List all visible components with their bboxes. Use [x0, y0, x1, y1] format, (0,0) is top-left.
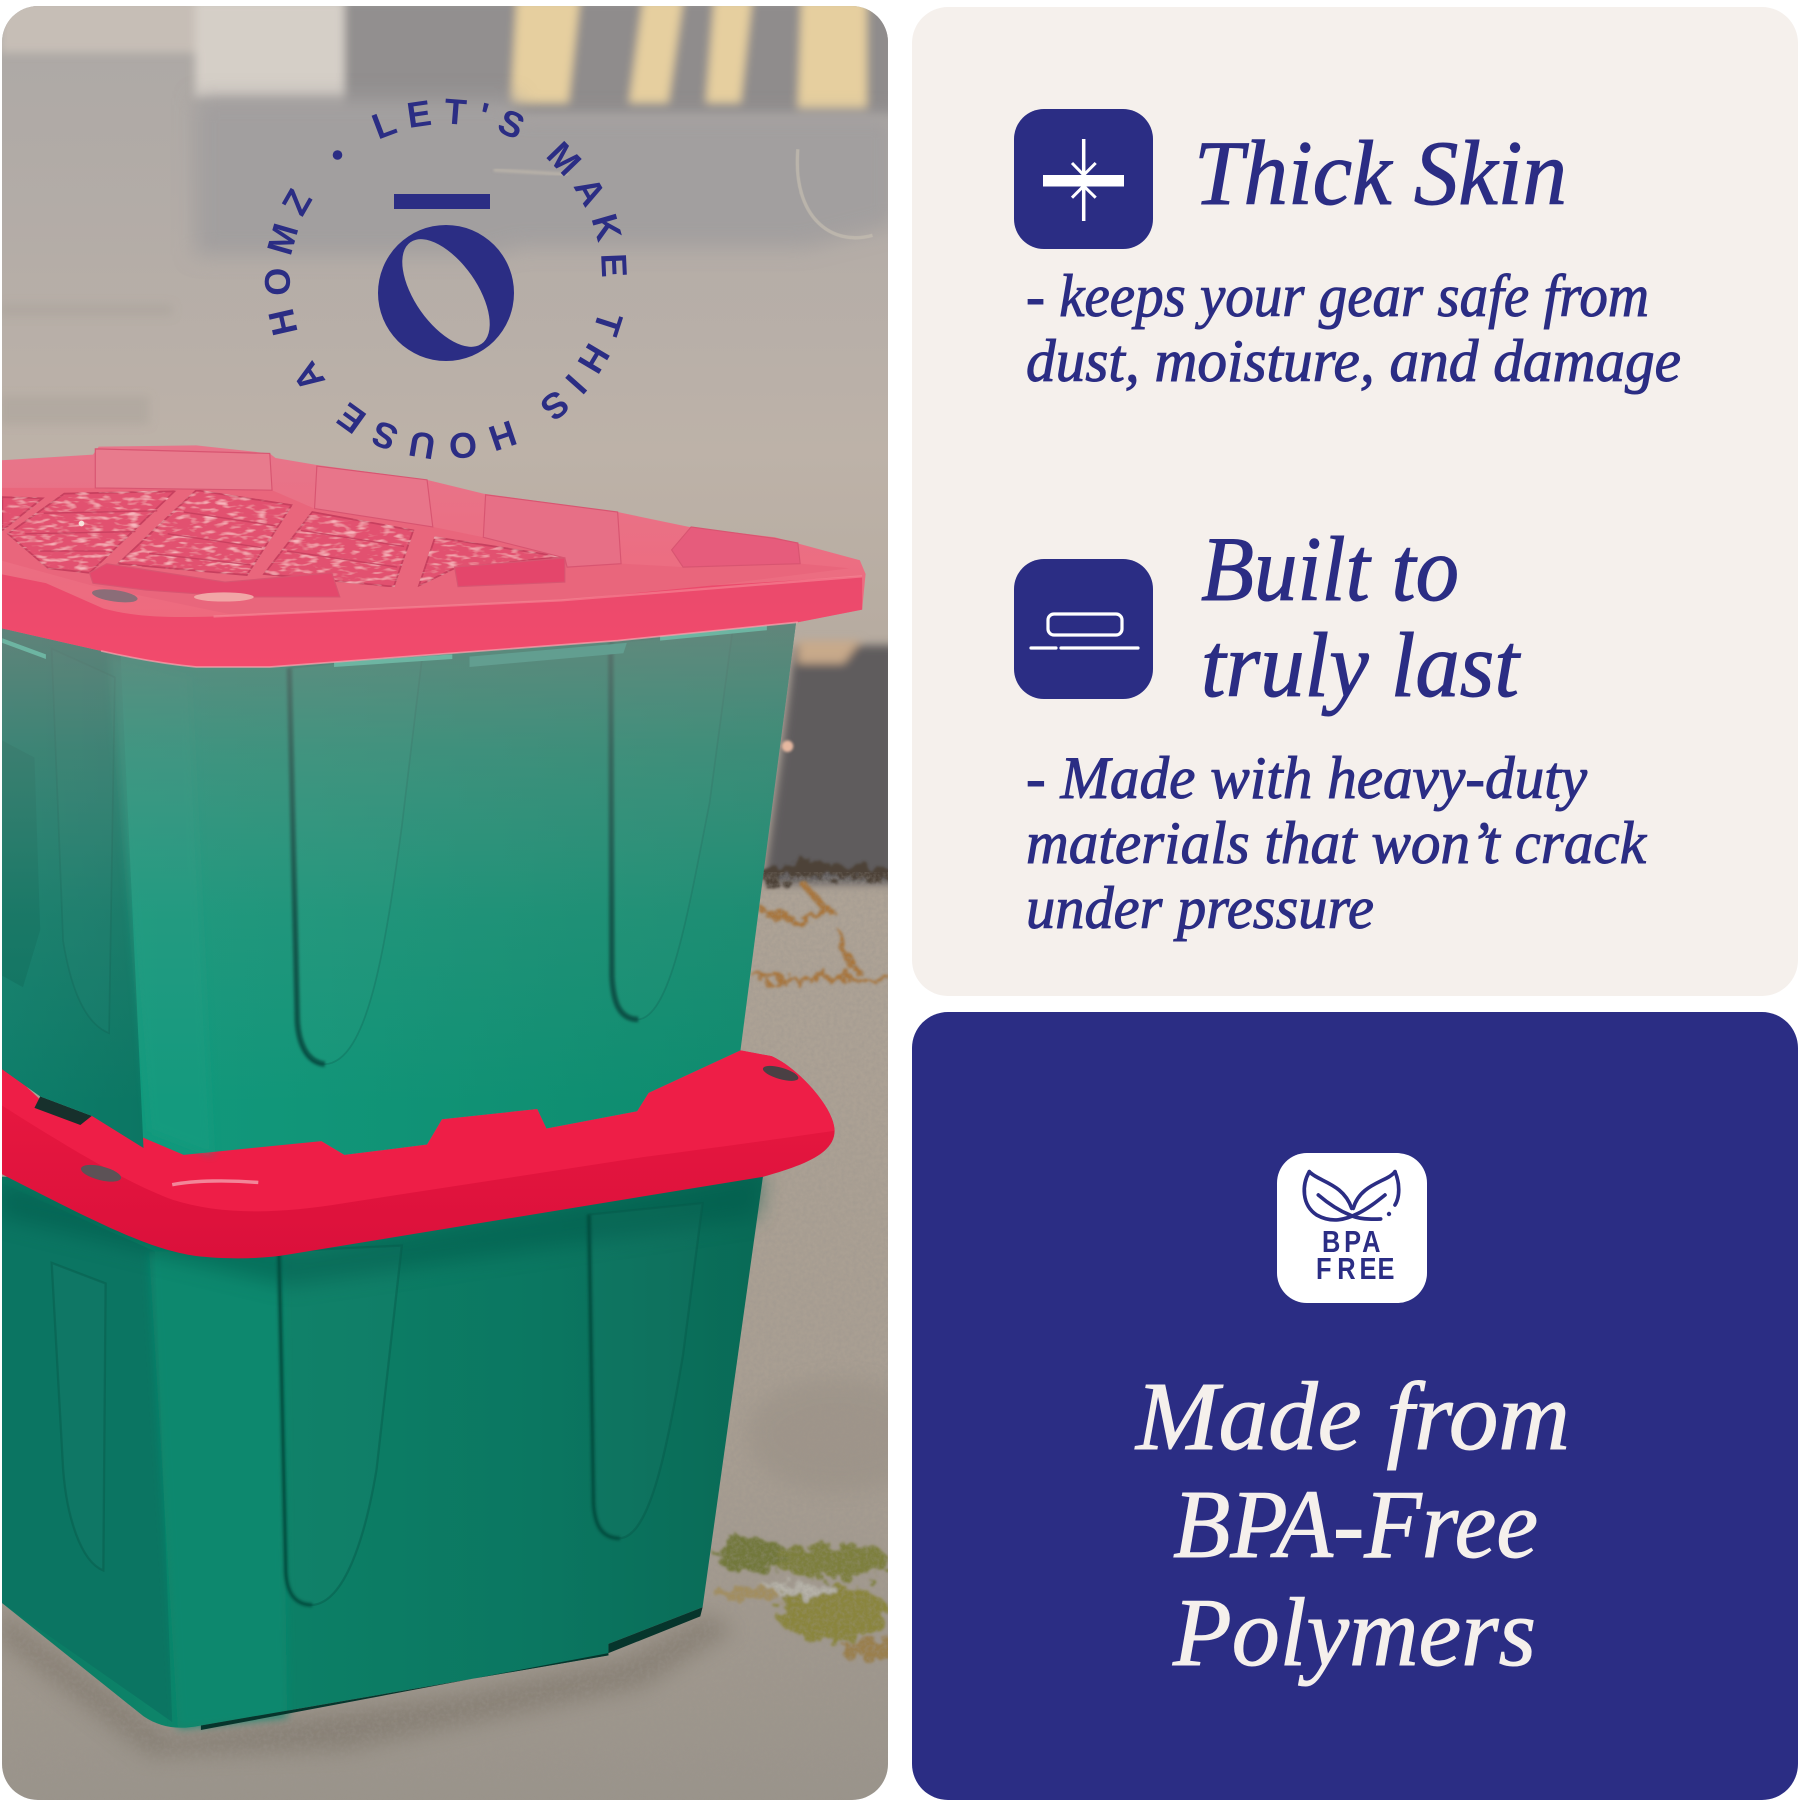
lid raised tabs — [90, 449, 800, 597]
text: built to last description: under pressure — [1026, 875, 1374, 941]
panel: product photo — [0, 0, 930, 1800]
circular slogan: LET'S MAKE THIS HOUSE A HOMZ — [264, 98, 627, 460]
heading: Thick Skin: Thick Skin — [1194, 122, 1567, 224]
heading: Built to truly last — [1201, 518, 1521, 716]
icon: thick skin — [1014, 109, 1153, 249]
text: thick skin description: - keeps your gear safe from — [1026, 263, 1649, 329]
icon: BPA free badge — [1277, 1153, 1427, 1303]
heading: Made from BPA-Free Polymers: Polymers — [1172, 1579, 1536, 1687]
upper storage tote — [0, 445, 895, 1155]
text: built to last description — [1026, 745, 1647, 941]
ring dot — [333, 150, 342, 160]
panel: features card — [912, 7, 1798, 996]
logo badge: circular text and O mark — [264, 98, 627, 460]
heading: Made from BPA-Free Polymers — [1134, 1363, 1570, 1687]
heading: Made from BPA-Free Polymers: Made from — [1134, 1363, 1570, 1471]
heading: Built to truly last: truly last — [1201, 614, 1521, 716]
icon: BPA free badge: FREE — [1316, 1252, 1394, 1287]
text: thick skin description: dust, moisture, and damage — [1026, 328, 1681, 394]
icon: BPA free badge: BPA — [1322, 1225, 1381, 1260]
lid panels — [2, 490, 561, 587]
lid front rim — [0, 574, 862, 667]
haze over the upper box — [2, 622, 796, 1014]
text: thick skin description — [1026, 263, 1681, 394]
text: built to last description: materials that won’t crack — [1026, 810, 1647, 876]
panel: BPA free card — [912, 1012, 1798, 1800]
heading: Made from BPA-Free Polymers: BPA-Free — [1173, 1471, 1538, 1579]
O mark — [378, 225, 514, 361]
upper tote lid — [0, 445, 866, 667]
text: built to last description: - Made with heavy-duty — [1026, 745, 1587, 811]
moss — [714, 1538, 905, 1661]
lid silhouette and rear wall — [0, 445, 866, 667]
photo background: street — [0, 0, 930, 1800]
inner well — [2, 488, 815, 566]
lower storage tote — [0, 1050, 835, 1730]
overbar — [394, 194, 490, 209]
lower tote lid — [0, 1050, 835, 1258]
icon: built to last — [1014, 559, 1153, 699]
heading: Built to truly last: Built to — [1201, 518, 1459, 620]
